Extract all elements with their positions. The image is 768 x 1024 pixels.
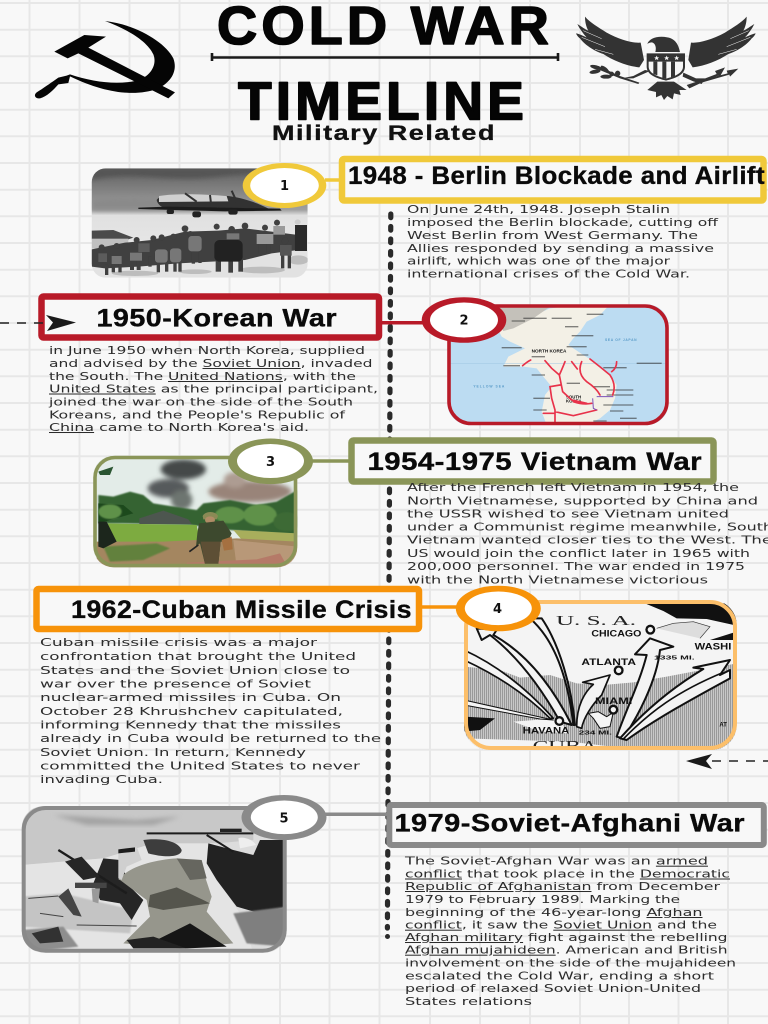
right wing — [688, 17, 756, 67]
photo: Soviet soldiers — [22, 806, 287, 953]
body text: international crises of the Cold War. — [407, 270, 690, 280]
labels: ATLANTA — [581, 657, 637, 667]
body text: and advised by the Soviet Union , invaded — [49, 359, 372, 370]
body text: States relations — [405, 997, 532, 1008]
title — [212, 0, 558, 145]
head — [647, 37, 680, 52]
body text: Soviet Union. In return, Kennedy — [40, 748, 306, 759]
body text: Allies responded by sending a massive — [407, 244, 714, 255]
airplane — [138, 191, 282, 217]
labels: AT — [719, 722, 727, 728]
heading box: 1950-Korean War — [96, 304, 337, 332]
labels: 234 MI. — [579, 730, 613, 736]
body text: States and the Soviet Union close to — [40, 666, 350, 677]
right dashed arrow — [686, 754, 768, 769]
ground — [92, 260, 308, 278]
map: Korea — [447, 304, 669, 425]
body text: beginning of the 46-year-long Afghan — [405, 908, 702, 919]
body text: North Vietnamese, supported by China and — [407, 496, 758, 507]
number badge 3: 3 — [266, 455, 275, 470]
body text: After the French left Vietnam in 1954, the — [407, 483, 739, 494]
body text: imposed the Berlin blockade, cutting off — [407, 218, 719, 229]
crowd — [92, 220, 298, 275]
hammer — [54, 35, 175, 98]
body text — [403, 857, 736, 1008]
main soldier — [93, 858, 143, 920]
soldier — [189, 512, 233, 564]
body text: the USSR wished to see Vietnam united — [407, 509, 729, 520]
heading box — [36, 589, 419, 629]
body text: On June 24th, 1948. Joseph Stalin — [407, 205, 670, 216]
number badge 5: 5 — [279, 812, 289, 826]
number badge 3 — [228, 438, 313, 484]
panel: 1948 Berlin — [92, 159, 765, 280]
labels: WASHI — [695, 641, 731, 651]
connector — [382, 321, 424, 324]
body text: period of relaxed Soviet Union-United — [405, 984, 701, 995]
map: Korea: SOUTH — [566, 394, 581, 399]
body text: invading Cuba. — [40, 775, 163, 786]
olive branch — [593, 66, 639, 84]
body text: Afghan military fight against the rebelling — [405, 933, 728, 944]
body text: joined the war on the side of the South — [47, 398, 353, 408]
body text — [407, 483, 768, 586]
panel: 1979 Soviet-Afghan War — [22, 795, 764, 1008]
shield — [647, 53, 685, 81]
map: Korea: YELLOW SEA — [473, 385, 505, 389]
body text: Cuban missile crisis was a major — [40, 638, 318, 649]
title divider — [212, 53, 558, 61]
title line 2: TIMELINE — [238, 72, 528, 132]
labels — [523, 613, 731, 756]
labels: CUBA — [533, 739, 598, 756]
body text — [407, 205, 719, 280]
number badge 4: 4 — [493, 602, 502, 617]
connector — [322, 813, 388, 816]
labels: U. S. A. — [556, 613, 636, 628]
body text: airlift, which was one of the major — [407, 256, 671, 268]
body text: the South. The United Nations , with the — [49, 372, 356, 383]
body text: Vietnam wanted closer ties to the West. The — [407, 536, 768, 547]
body text: confrontation that brought the United — [40, 652, 356, 663]
icon: hammer and sickle — [35, 21, 175, 98]
body text: with the North Vietnamese victorious — [407, 575, 708, 586]
icon: American eagle emblem — [576, 17, 756, 100]
body text: 1979 to February 1989. Marking the — [405, 895, 680, 906]
heading box: 1948 - Berlin Blockade and Airlift — [348, 162, 765, 190]
body text: Afghan mujahideen . American and British — [405, 946, 728, 957]
number badge 1: 1 — [280, 179, 289, 194]
number badge 2 — [422, 297, 506, 343]
body text — [47, 346, 378, 434]
timeline dashed spine — [385, 214, 391, 939]
stars — [654, 56, 679, 60]
labels: MIAMI — [595, 696, 632, 706]
number badge 2: 2 — [459, 314, 469, 328]
heading box — [342, 159, 765, 200]
panel: 1962 Cuban Missile Crisis — [36, 586, 737, 786]
number badge 1 — [243, 163, 326, 208]
body text: 200,000 personnel. The war ended in 1975 — [407, 562, 745, 573]
connector — [325, 178, 340, 182]
heading box: 1979-Soviet-Afghani War — [394, 810, 745, 838]
body text: Republic of Afghanistan from December — [405, 882, 721, 893]
body text — [40, 638, 381, 786]
number badge 4 — [456, 586, 541, 631]
labels: HAVANA — [523, 725, 570, 735]
body text: US would join the conflict later in 1965 with — [407, 549, 750, 560]
heading box — [352, 440, 714, 482]
photo: Berlin airlift — [92, 168, 308, 278]
body text: informing Kennedy that the missiles — [40, 720, 341, 732]
subtitle: Military Related — [272, 122, 496, 145]
rifle — [58, 850, 127, 893]
tail — [647, 82, 687, 100]
body text: conflict , it saw the Soviet Union and the — [405, 921, 717, 932]
heading box — [389, 805, 764, 845]
panel: 1954-1975 Vietnam War — [93, 438, 768, 586]
body text: conflict that took place in the Democratic — [405, 870, 730, 880]
connector — [310, 459, 350, 463]
city markers — [554, 625, 655, 726]
panel: 1950 Korean War — [42, 296, 669, 434]
body text: October 28 Khrushchev capitulated, — [40, 707, 343, 718]
left dashed arrow — [0, 315, 76, 331]
arrows — [687, 69, 738, 88]
rear soldier — [207, 840, 287, 913]
body text: The Soviet-Afghan War was an armed — [403, 857, 708, 868]
heading box — [42, 296, 379, 338]
photo: soldier in Vietnam — [93, 456, 300, 567]
body text: United States as the principal participant, — [49, 384, 378, 396]
body text: West Berlin from West Germany. The — [407, 231, 698, 242]
heading box: 1954-1975 Vietnam War — [368, 448, 702, 476]
left wing — [576, 17, 644, 67]
body text: committed the United States to never — [40, 762, 361, 772]
body text: under a Communist regime meanwhile, South — [407, 522, 768, 534]
connector — [421, 605, 460, 609]
body text: already in Cuba would be returned to the — [40, 734, 381, 745]
body text: in June 1950 when North Korea, supplied — [49, 346, 365, 357]
number badge 5 — [242, 795, 326, 840]
map: Korea: NORTH KOREA — [532, 348, 567, 353]
labels: 1335 MI. — [654, 656, 696, 662]
sickle — [35, 21, 175, 98]
body text: war over the presence of Soviet — [40, 680, 311, 690]
body text: China came to North Korea's aid. — [49, 423, 309, 434]
trajectory arrows — [464, 618, 730, 740]
body text: nuclear-armed missiles in Cuba. On — [40, 693, 341, 704]
heading box: 1962-Cuban Missile Crisis — [71, 596, 412, 624]
labels: CHICAGO — [591, 629, 641, 639]
body text: Koreans, and the People's Republic of — [49, 410, 346, 422]
body text: involvement on the side of the mujahideen — [405, 959, 736, 970]
body text: escalated the Cold War, ending a short — [405, 971, 714, 982]
map: Korea: SEA OF JAPAN — [605, 338, 637, 342]
map: missile ranges — [464, 600, 737, 756]
building — [92, 230, 133, 239]
map: Korea: KOREA — [566, 398, 583, 403]
